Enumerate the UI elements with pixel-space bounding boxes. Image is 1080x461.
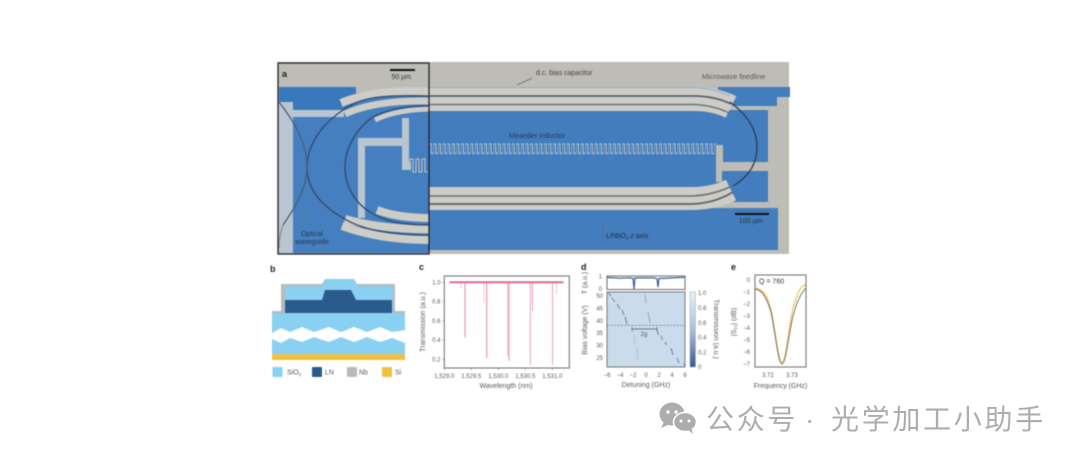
panel b: layer stack: [270, 264, 405, 377]
main image background: [278, 62, 789, 254]
icon: chat bubbles: [660, 402, 696, 434]
x ticks: −2: [630, 373, 637, 379]
y ticks: 0.8: [432, 300, 441, 306]
label: feedline: Microwave feedline: [702, 72, 765, 81]
fit and data: [755, 285, 806, 364]
colour bar: [690, 291, 719, 371]
label: capacitor: [517, 70, 593, 85]
x ticks: 1,530.5: [515, 374, 536, 380]
dashed line: [607, 324, 685, 326]
legend: SiO: [287, 370, 299, 376]
top trace: [582, 272, 685, 294]
top trace: T (a.u.): [582, 272, 589, 294]
silicon: [272, 354, 405, 360]
Q label: Q = 760: [759, 278, 784, 286]
inset frame: [278, 63, 429, 254]
y ticks: −1: [743, 290, 751, 296]
x ticks: 1,531.0: [542, 374, 563, 380]
upper silica: [284, 279, 393, 313]
panel e: S21 resonance: [731, 262, 807, 390]
lithium niobate: [285, 290, 392, 313]
y axis title: Transmission (a.u.): [420, 292, 427, 352]
legend: [272, 367, 402, 377]
2g arrow: 2g: [641, 332, 647, 338]
meander inductor: [429, 143, 716, 154]
top trace: 1: [599, 274, 603, 280]
watermark text: ·: [805, 404, 817, 435]
panel label b: b: [270, 264, 276, 274]
y ticks: 30: [596, 344, 604, 350]
plot frame: [755, 275, 806, 367]
y ticks: 0: [747, 278, 751, 284]
x ticks: −4: [617, 373, 624, 379]
label: LiNbO3 axis: 3: [626, 236, 629, 240]
legend: 2: [299, 372, 302, 377]
label: optical waveguide: [294, 207, 329, 246]
y ticks: [596, 294, 604, 362]
panel label e: e: [731, 262, 736, 272]
colour bar: 0.6: [698, 321, 707, 327]
top trace: 0: [599, 287, 603, 293]
panel label d: d: [581, 262, 586, 272]
y axis title: | (dB): [731, 308, 738, 325]
watermark: [660, 402, 1046, 435]
y ticks: 1.0: [432, 280, 441, 286]
label: capacitor: d.c. bias capacitor: [536, 70, 593, 77]
colour bar: 0.4: [698, 336, 707, 342]
inset image: [278, 63, 429, 254]
y ticks: 50: [596, 294, 604, 300]
watermark text: [706, 404, 1046, 435]
y axis title: 21: [733, 324, 738, 330]
y ticks: 25: [596, 356, 604, 362]
y ticks: 0.4: [432, 338, 441, 344]
y ticks: −2: [743, 302, 751, 308]
x axis title: Frequency (GHz): [754, 383, 807, 390]
label: optical waveguide: Optical: [301, 231, 323, 238]
baseline: [450, 281, 564, 283]
resonance dips: [461, 282, 556, 365]
x ticks: 1,530.0: [488, 374, 509, 380]
y ticks: −7: [743, 362, 751, 368]
heatmap: [607, 292, 685, 367]
panel label c: c: [419, 262, 424, 272]
x axis title: Wavelength (nm): [479, 383, 533, 390]
label: LiNbO3 axis: [602, 226, 649, 243]
gray feed connector: [716, 145, 768, 182]
x ticks: [604, 373, 687, 379]
panel a: micrograph: [278, 62, 790, 254]
capacitor top: [429, 88, 731, 113]
scale bar 50 um: [390, 69, 415, 81]
label: LiNbO3 axis: LiNbO: [606, 233, 626, 240]
legend: Nb: [359, 370, 368, 376]
label: LiNbO3 axis: z: [628, 233, 634, 240]
white wave gap: [272, 327, 405, 343]
label: meander: Meander inductor: [509, 131, 566, 140]
watermark text: 公众号: [706, 404, 798, 435]
x ticks: −6: [604, 373, 611, 379]
x axis title: Detuning (GHz): [622, 382, 670, 389]
panel label a: a: [282, 69, 288, 79]
y axis title: |S: [731, 330, 738, 336]
y ticks: 45: [596, 306, 604, 312]
scale bar 100 um: 100 µm: [739, 218, 763, 225]
panel c: transmission spectrum: [419, 262, 569, 390]
x ticks: 4: [670, 373, 674, 379]
colour bar: 0: [698, 365, 702, 371]
x ticks: 0: [644, 373, 648, 379]
x ticks: [434, 368, 563, 380]
x ticks: 3.73: [786, 373, 798, 379]
x ticks: 3.72: [762, 373, 774, 379]
watermark text: 光学加工小助手: [831, 404, 1046, 435]
substrate: [272, 313, 405, 355]
colour bar: Transmission (a.u.): [712, 299, 719, 359]
y ticks: [743, 278, 751, 368]
x ticks: 2: [657, 373, 661, 379]
legend: LN: [325, 370, 334, 376]
y ticks: 0.2: [432, 357, 441, 363]
legend: Si: [395, 370, 402, 376]
x ticks: 1,529.5: [461, 374, 482, 380]
plot frame: [444, 276, 569, 368]
y ticks: −4: [743, 326, 751, 332]
colour bar: 0.8: [698, 306, 707, 312]
y ticks: −5: [743, 338, 751, 344]
inset waveguides: [279, 96, 428, 248]
panel d: bias sweep: [581, 262, 719, 389]
y ticks: 40: [596, 319, 604, 325]
y ticks: 0.6: [432, 319, 441, 325]
x ticks: 6: [683, 373, 687, 379]
label: LiNbO3 axis: axis: [636, 233, 648, 240]
ring waveguide right: [730, 102, 757, 186]
niobium: [272, 279, 405, 313]
y ticks: 35: [596, 331, 604, 337]
scale bar 100 um: [735, 213, 769, 225]
y ticks: [432, 280, 444, 363]
label: optical waveguide: waveguide: [294, 239, 329, 246]
colour bar: 1.0: [698, 291, 707, 297]
y ticks: −3: [743, 314, 751, 320]
x ticks: 1,529.0: [434, 374, 455, 380]
x ticks: [762, 373, 798, 379]
colour bar: 0.2: [698, 350, 707, 356]
capacitor bottom: [429, 186, 733, 204]
y axis title: Bias voltage (V): [582, 305, 589, 355]
scale bar 50 um: 50 µm: [392, 74, 411, 81]
blue substrate areas: [429, 87, 790, 250]
y ticks: −6: [743, 350, 751, 356]
